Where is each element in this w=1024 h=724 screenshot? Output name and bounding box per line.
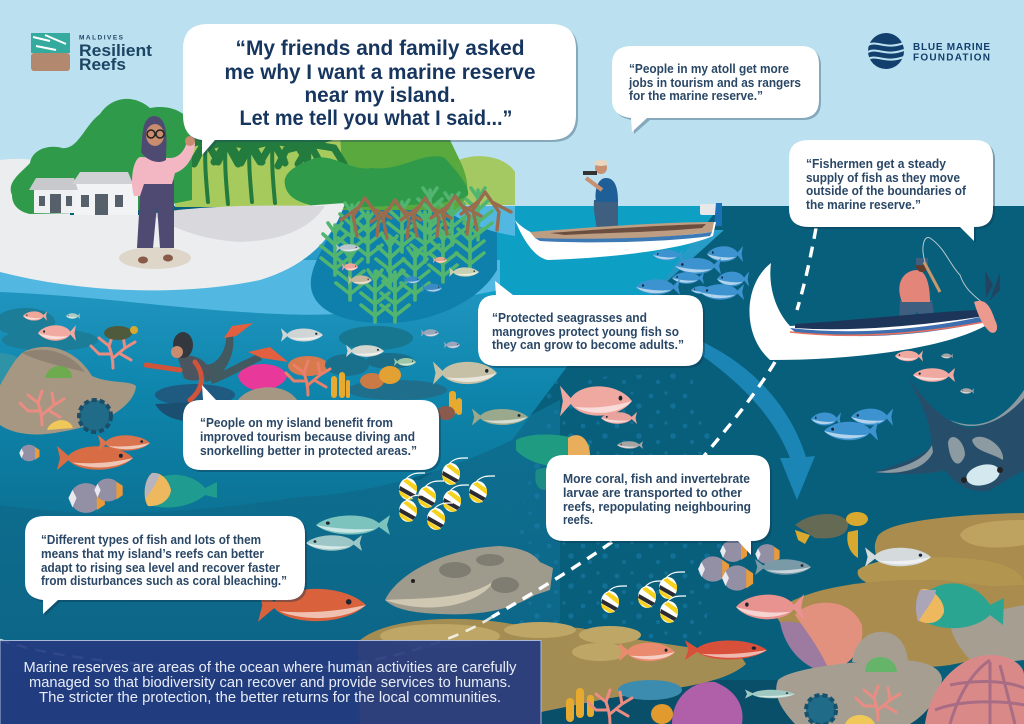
diver: [146, 323, 288, 400]
left dark green tree: [11, 99, 192, 214]
parrotfish school top: [636, 246, 749, 300]
larvae speckles: [520, 372, 735, 640]
hull: [749, 263, 985, 360]
main table coral: [775, 580, 1024, 667]
torso: [178, 356, 212, 380]
blue lens: [618, 680, 682, 700]
logo: Blue Marine Foundation: BLUE MARINE: [913, 42, 990, 53]
face: [146, 124, 164, 146]
bannerfish school: [399, 458, 495, 530]
headline: me why I want a marine reserve: [224, 60, 536, 84]
seagrass fish: [336, 244, 479, 292]
sky background: [0, 0, 1024, 207]
bubble: different types of fish: from disturbances such as coral bleaching.”: [41, 573, 287, 588]
bubble: larvae transport: [546, 455, 772, 557]
palm trees: [174, 132, 344, 206]
green parrotfish: [516, 435, 590, 466]
observer man: [583, 160, 618, 232]
outboard motor: [700, 203, 722, 226]
head: [173, 332, 193, 358]
deep ocean: [0, 206, 1024, 724]
branching coral: [91, 334, 135, 368]
bubble: larvae transport: larvae are transported to other: [563, 485, 742, 500]
logo: Blue Marine Foundation: FOUNDATION: [913, 52, 990, 64]
red grouper: [258, 588, 366, 622]
hijab: [141, 116, 166, 162]
mid-depth water band: [0, 400, 560, 724]
brain rock: [238, 387, 297, 400]
parrotfish left: [145, 473, 217, 508]
logo: Maldives Resilient Reefs: MALDIVES: [79, 34, 124, 42]
fisher: [899, 258, 940, 322]
bubble: fishermen: the marine reserve.”: [806, 197, 921, 212]
bubble: different types of fish: means that my island’s reefs can better: [41, 546, 264, 561]
turtle: [795, 512, 868, 558]
trousers: [137, 180, 174, 248]
mangrove roots: [341, 192, 511, 238]
hand: [185, 136, 195, 146]
bubble: seagrass protection: they can grow to become adults.”: [492, 337, 684, 352]
fishing line: [923, 237, 985, 305]
bubble: different types of fish: [25, 516, 307, 616]
bubble: different types of fish: “Different types of fish and lots of them: [41, 532, 261, 547]
faint dashes beneath panel: [0, 617, 492, 671]
grey rock: [776, 660, 942, 724]
bubble: larvae transport: More coral, fish and invertebrate: [563, 471, 750, 486]
boat two: [749, 237, 1000, 360]
green dome: [865, 657, 897, 672]
fan shell: [47, 420, 73, 430]
tables under diver: [155, 384, 235, 406]
buildings: [29, 172, 138, 215]
island: [0, 99, 515, 323]
brain coral: [806, 695, 836, 724]
parrotfish right: [916, 583, 1004, 628]
table corals: [0, 308, 98, 383]
orange coral: [286, 361, 330, 395]
seagrass water: [311, 205, 497, 323]
turtle small: [104, 326, 138, 340]
green dome coral: [45, 366, 72, 378]
bubble: seagrass protection: [478, 281, 705, 368]
back mid-green tree: [335, 140, 467, 210]
panel text: Marine reserves are areas of the ocean where human activities are carefully: [24, 660, 517, 676]
mid water fish: [516, 386, 643, 490]
logo: Maldives Resilient Reefs: Resilient: [79, 42, 153, 60]
legs: [200, 332, 233, 382]
bubble: fishermen: [789, 140, 995, 243]
deck: [795, 310, 985, 329]
bubble: larvae transport: reefs.: [563, 512, 593, 527]
yellow sponges: [331, 372, 462, 415]
seagrass: [321, 188, 492, 322]
bubble: jobs in tourism: for the marine reserve.”: [629, 88, 763, 103]
bubble: seagrass protection: mangroves protect young fish so: [492, 324, 679, 339]
big grouper: [385, 546, 553, 614]
hull: [515, 220, 716, 260]
pink anemone: [238, 364, 287, 392]
logo: Maldives Resilient Reefs: Reefs: [79, 56, 126, 74]
table coral mass: [358, 619, 746, 724]
left reef: [0, 308, 462, 434]
pink fish under boat: [895, 351, 974, 394]
arms: [146, 362, 201, 400]
striped coral: [288, 356, 328, 376]
fins: [224, 323, 288, 362]
light water top-right: [440, 206, 515, 236]
bubble: tourism benefit: improved tourism because diving and: [200, 429, 415, 444]
jacks: [306, 515, 390, 551]
upper table coral: [875, 513, 1024, 592]
boat one: [515, 160, 722, 260]
coral fan pink: [795, 603, 862, 672]
glasses: [147, 130, 164, 138]
shell: [845, 715, 875, 724]
main speech bubble: [183, 24, 578, 157]
orange sponge: [566, 688, 594, 722]
blue arrow: [694, 338, 815, 500]
manta ray: [875, 378, 1024, 491]
logo: Blue Marine Foundation: [868, 33, 990, 69]
bubble: jobs in tourism: [612, 46, 821, 134]
shoes: [138, 254, 173, 264]
caught fish: [974, 301, 997, 333]
bubble: different types of fish: adapt to rising sea level and recover faster: [41, 560, 280, 575]
bubble: larvae transport: reefs, repopulating neighbouring: [563, 499, 751, 514]
shirt and arm: [132, 142, 195, 196]
foreground beach: [0, 203, 345, 290]
bubble: tourism benefit: [183, 385, 441, 472]
bottom info panel: [0, 640, 541, 724]
turquoise water near boat: [470, 206, 720, 295]
bubble: seagrass protection: “Protected seagrasses and: [492, 310, 647, 325]
headline: Let me tell you what I said...”: [240, 106, 512, 130]
right dark green tree: [285, 156, 468, 208]
bubble: fishermen: “Fishermen get a steady: [806, 156, 947, 171]
shallow reef water: [0, 230, 724, 513]
panel text: The stricter the protection, the better returns for the local communities.: [39, 690, 501, 706]
small grey rock: [852, 632, 908, 664]
woman: [119, 116, 195, 269]
deep shadow: [541, 680, 1024, 724]
right coral fan: [925, 655, 1024, 724]
bubble: fishermen: supply of fish as they move: [806, 170, 960, 185]
lower right fish: [601, 540, 931, 698]
back beach: [0, 159, 70, 260]
bubble: jobs in tourism: jobs in tourism and as rangers: [628, 75, 801, 90]
deck: [530, 222, 714, 240]
shallow fish: [19, 311, 528, 513]
orange lumps: [360, 373, 384, 389]
right reef: [541, 513, 1024, 724]
bubble: tourism benefit: “People on my island benefit from: [200, 415, 393, 430]
bubble: fishermen: outside of the boundaries of: [806, 183, 967, 198]
light green forest behind palms: [172, 135, 345, 207]
headline: “My friends and family asked: [236, 36, 524, 60]
bubble: tourism benefit: snorkelling better in protected areas.”: [200, 443, 417, 458]
rock: [0, 347, 136, 434]
shadow: [119, 247, 191, 269]
coral fan purple lattice: [780, 622, 835, 672]
far-right light tree: [450, 156, 515, 205]
blue school right: [811, 408, 893, 441]
brain coral: [79, 400, 111, 432]
branching coral: [856, 686, 900, 720]
white dashed reserve boundary: [492, 228, 816, 617]
sand shadow: [150, 206, 325, 242]
bubble: jobs in tourism: “People in my atoll get more: [629, 61, 789, 76]
right rock: [950, 605, 1024, 665]
lagoon light water: [0, 260, 500, 315]
panel text: managed so that biodiversity can recover and provide services to humans.: [29, 675, 511, 691]
headline: near my island.: [304, 83, 456, 107]
left bottom reef: [358, 619, 746, 724]
purple fan coral: [672, 682, 743, 724]
logo: Maldives Resilient Reefs: [31, 33, 153, 74]
